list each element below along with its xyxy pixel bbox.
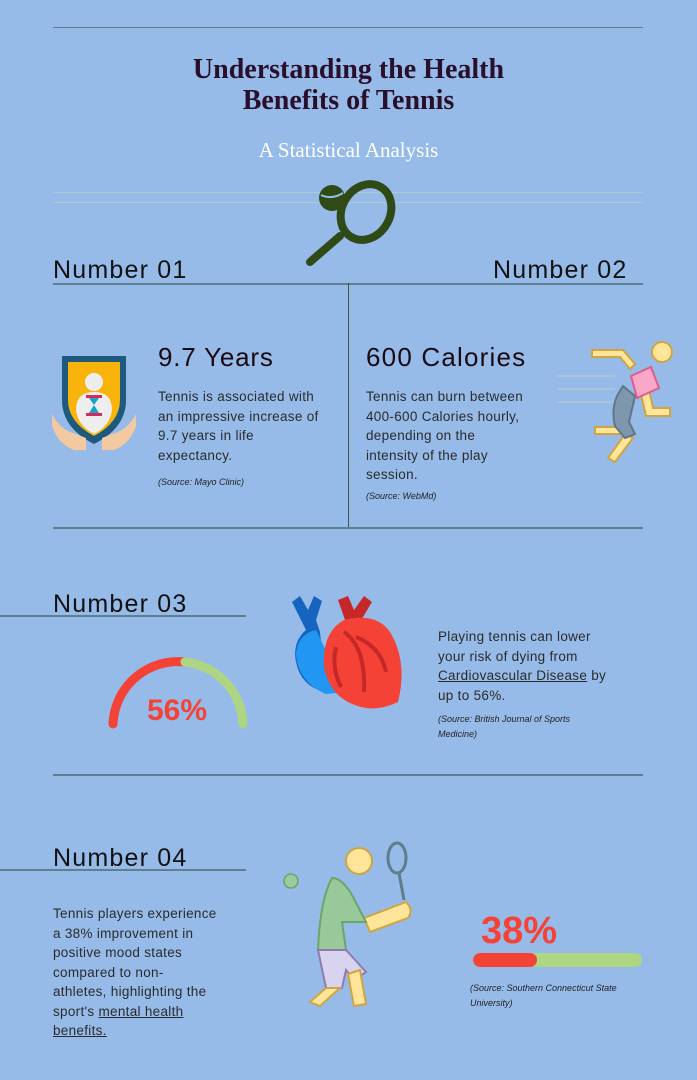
source 03 xyxy=(438,714,570,739)
title: Benefits of Tennis xyxy=(243,85,454,116)
icon: shield hands xyxy=(52,356,136,450)
text block 02: Tennis can burn between xyxy=(366,389,523,404)
icon: runner xyxy=(557,341,673,464)
text block 01: Tennis is associated with xyxy=(158,389,314,404)
progress bar xyxy=(473,953,642,967)
text block 02: intensity of the play xyxy=(366,448,488,462)
icon: tennis player xyxy=(283,842,412,1008)
text block 02: depending on the xyxy=(366,428,475,443)
text block 04: sport's mental health xyxy=(53,1004,183,1018)
text block 02 xyxy=(366,389,523,482)
heading: Number 03: Number 03 xyxy=(53,590,187,618)
text block 04: Tennis players experience xyxy=(53,906,217,921)
text block 02: 400-600 Calories hourly, xyxy=(366,408,519,424)
gauge 56%: 56% xyxy=(147,694,207,727)
stat: 38%: 38% xyxy=(481,910,557,952)
text block 01: 9.7 years in life xyxy=(158,428,254,443)
text block 03: Cardiovascular Disease by xyxy=(438,668,606,683)
stat: 600 Calories: 600 Calories xyxy=(366,342,526,372)
source 03: (Source: British Journal of Sports xyxy=(438,714,570,724)
source 04: (Source: Southern Connecticut State xyxy=(470,983,617,993)
source 04: University) xyxy=(470,998,513,1008)
text block 01 xyxy=(158,389,319,463)
text block 04: positive mood states xyxy=(53,945,182,960)
text block 04 xyxy=(53,906,217,1038)
source 02: (Source: WebMd) xyxy=(366,491,436,501)
heading: Number 02: Number 02 xyxy=(493,256,627,284)
text block 03 xyxy=(438,629,606,703)
text block 04: athletes, highlighting the xyxy=(53,984,206,999)
heading: Number 01: Number 01 xyxy=(53,256,187,284)
icon: tennis racket xyxy=(306,180,396,266)
source 04 xyxy=(470,983,617,1008)
gauge 56% xyxy=(108,657,248,728)
icon: heart xyxy=(292,596,402,708)
source 03: Medicine) xyxy=(438,729,477,739)
text block 02: session. xyxy=(366,467,418,482)
text block 03: your risk of dying from xyxy=(438,648,578,664)
stat: 9.7 Years: 9.7 Years xyxy=(158,342,274,372)
text block 03: Playing tennis can lower xyxy=(438,629,591,644)
text block 01: an impressive increase of xyxy=(158,408,319,424)
text block 04: compared to non- xyxy=(53,964,164,980)
text block 04: benefits. xyxy=(53,1023,107,1038)
title xyxy=(193,54,504,116)
source 01: (Source: Mayo Clinic) xyxy=(158,477,244,487)
text block 03: up to 56%. xyxy=(438,688,506,702)
text block 04: a 38% improvement in xyxy=(53,926,193,940)
text block 01: expectancy. xyxy=(158,448,232,462)
title: Understanding the Health xyxy=(193,54,504,85)
heading: Number 04: Number 04 xyxy=(53,844,187,872)
subtitle: A Statistical Analysis xyxy=(259,138,438,162)
